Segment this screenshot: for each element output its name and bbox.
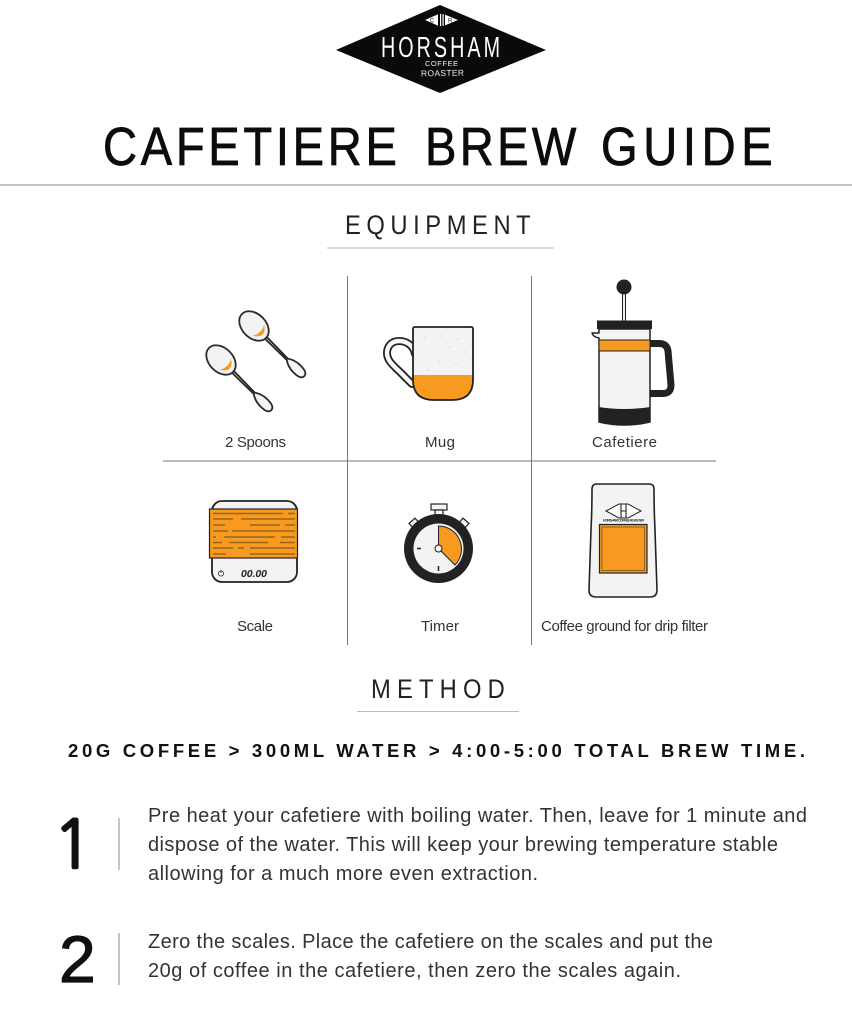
step 2: 2	[59, 922, 96, 996]
equipment grid lines	[163, 276, 716, 645]
icon: cafetiere	[592, 280, 671, 425]
icon: coffee bag	[589, 484, 657, 597]
icon: scale: 00.00	[241, 568, 267, 580]
icon: coffee bag: HORSHAM COFFEE ROASTER	[603, 518, 644, 522]
step 1: Pre heat your cafetiere with boiling water. Then, leave for 1 minute and	[148, 805, 807, 827]
label: cafetiere: Cafetiere	[592, 434, 657, 451]
step 2: Zero the scales. Place the cafetiere on the scales and put the	[148, 931, 713, 953]
step 2	[59, 922, 713, 996]
logo: Horsham Coffee Roaster: ROASTER	[421, 68, 464, 78]
label: 2 spoons: 2 Spoons	[225, 434, 286, 451]
ratio line: 20G COFFEE > 300ML WATER > 4:00-5:00 TOTAL BREW TIME.	[68, 740, 805, 761]
icon: timer	[404, 504, 473, 583]
label: coffee ground: Coffee ground for drip filter	[541, 618, 708, 635]
label: mug: Mug	[425, 434, 455, 451]
title: CAFETIERE	[103, 116, 397, 177]
step 1: allowing for a much more even extraction.	[148, 863, 538, 885]
label: timer: Timer	[421, 618, 459, 635]
icon: mug	[387, 327, 473, 400]
title: BREW	[425, 116, 577, 177]
step 1: dispose of the water. This will keep your brewing temperature stable	[148, 834, 778, 856]
logo: Horsham Coffee Roaster: HORSHAM	[381, 32, 500, 64]
heading: method: METHOD	[371, 675, 505, 704]
icon: two spoons	[200, 305, 313, 419]
label: scale: Scale	[237, 618, 273, 635]
heading: equipment: EQUIPMENT	[345, 211, 531, 240]
title: GUIDE	[601, 116, 773, 177]
title	[103, 116, 773, 177]
logo: Horsham Coffee Roaster	[336, 5, 546, 93]
step 2: 20g of coffee in the cafetiere, then zero the scales again.	[148, 960, 681, 982]
step 1: 1	[53, 812, 93, 878]
icon: scale	[210, 501, 298, 582]
logo: Horsham Coffee Roaster: C	[430, 18, 435, 24]
logo: Horsham Coffee Roaster: R	[448, 18, 453, 24]
step 1	[53, 805, 807, 885]
logo: Horsham Coffee Roaster: COFFEE	[425, 59, 458, 68]
